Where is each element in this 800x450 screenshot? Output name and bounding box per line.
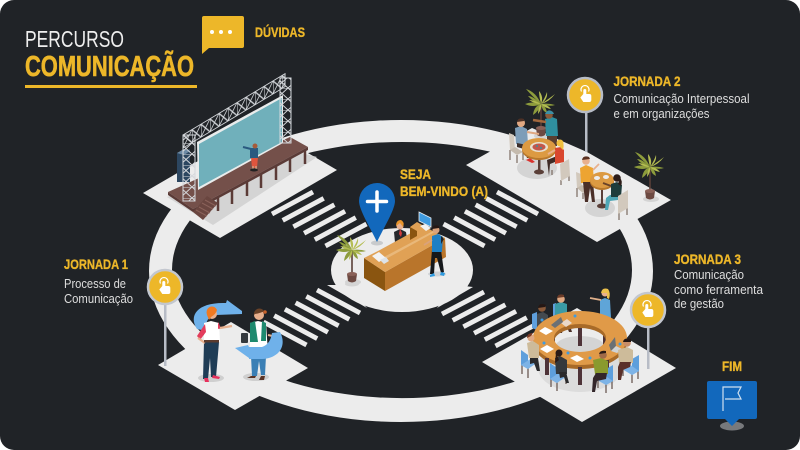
doubts label: DÚVIDAS [255, 23, 305, 40]
journey 3 scene: round table meeting [521, 288, 639, 393]
speakers [177, 149, 190, 182]
stage deck [168, 137, 308, 209]
welcome text [400, 166, 488, 199]
journey 2 text [614, 73, 750, 121]
receptionist [394, 220, 408, 253]
plaza floors [143, 125, 676, 422]
title: COMUNICAÇÃO [25, 49, 194, 83]
arrow bottom [235, 332, 283, 359]
seated man [509, 118, 539, 163]
palm [525, 89, 555, 139]
title [25, 26, 197, 88]
woman back left [532, 304, 548, 330]
truss [183, 74, 291, 201]
woman blonde [547, 140, 570, 185]
road ring [149, 120, 653, 422]
end label: FIM [722, 358, 742, 374]
journey 2 marker [568, 78, 602, 152]
back table legs [553, 325, 605, 347]
journey 3 text: JORNADA 3 [674, 251, 741, 267]
journey 1 text [64, 256, 133, 306]
speaker person [243, 144, 258, 172]
icon: doubts speech bubble [202, 16, 244, 54]
man back [553, 294, 572, 333]
screen [197, 95, 283, 190]
journey 2 scene: café [509, 89, 664, 220]
palm [336, 235, 366, 285]
welcome text: SEJA [400, 166, 431, 182]
journey 1 text: Processo de [64, 277, 126, 291]
title: PERCURSO [25, 26, 124, 52]
standing woman [590, 288, 611, 331]
seated bottom-left woman [550, 350, 569, 391]
man [241, 309, 277, 380]
journey 3 text: de gestão [674, 297, 724, 311]
journey 1 scene: two people with arrows [194, 300, 283, 382]
journey 2 text: e em organizações [614, 107, 710, 121]
seated right man [618, 338, 639, 383]
front legs [547, 358, 607, 385]
journey 3 text: como ferramenta [674, 283, 763, 297]
journey 2 text: Comunicação Interpessoal [614, 92, 750, 106]
stage with truss and speaker [167, 74, 317, 225]
stairs [193, 196, 218, 220]
seated left woman [521, 333, 540, 378]
table 1 [522, 138, 556, 174]
icon: end flag marker [707, 381, 757, 430]
reception: desk, receptionist, visitor, plant [336, 212, 446, 291]
journey 1 text: JORNADA 1 [64, 256, 128, 272]
journey 1 marker [148, 270, 182, 366]
waiter [533, 110, 558, 146]
welcome pin [359, 183, 395, 246]
palm right [634, 152, 664, 202]
journey 3 marker [631, 293, 665, 369]
journey 2 text: JORNADA 2 [614, 73, 681, 89]
crosswalks [264, 192, 538, 346]
arrow top [194, 300, 242, 331]
journey 1 text: Comunicação [64, 292, 133, 306]
papers and laptops [539, 314, 622, 362]
desk [364, 222, 446, 291]
ring table [533, 311, 627, 369]
visitor [424, 225, 446, 277]
journey 3 text [674, 251, 763, 311]
monitor [419, 212, 431, 227]
welcome text: BEM-VINDO (A) [400, 183, 488, 199]
stage legs [218, 150, 305, 211]
seated green man [592, 351, 613, 393]
journey 3 text: Comunicação [674, 268, 744, 282]
central hub [327, 228, 473, 312]
woman [197, 306, 232, 382]
table 2 group [576, 156, 628, 220]
